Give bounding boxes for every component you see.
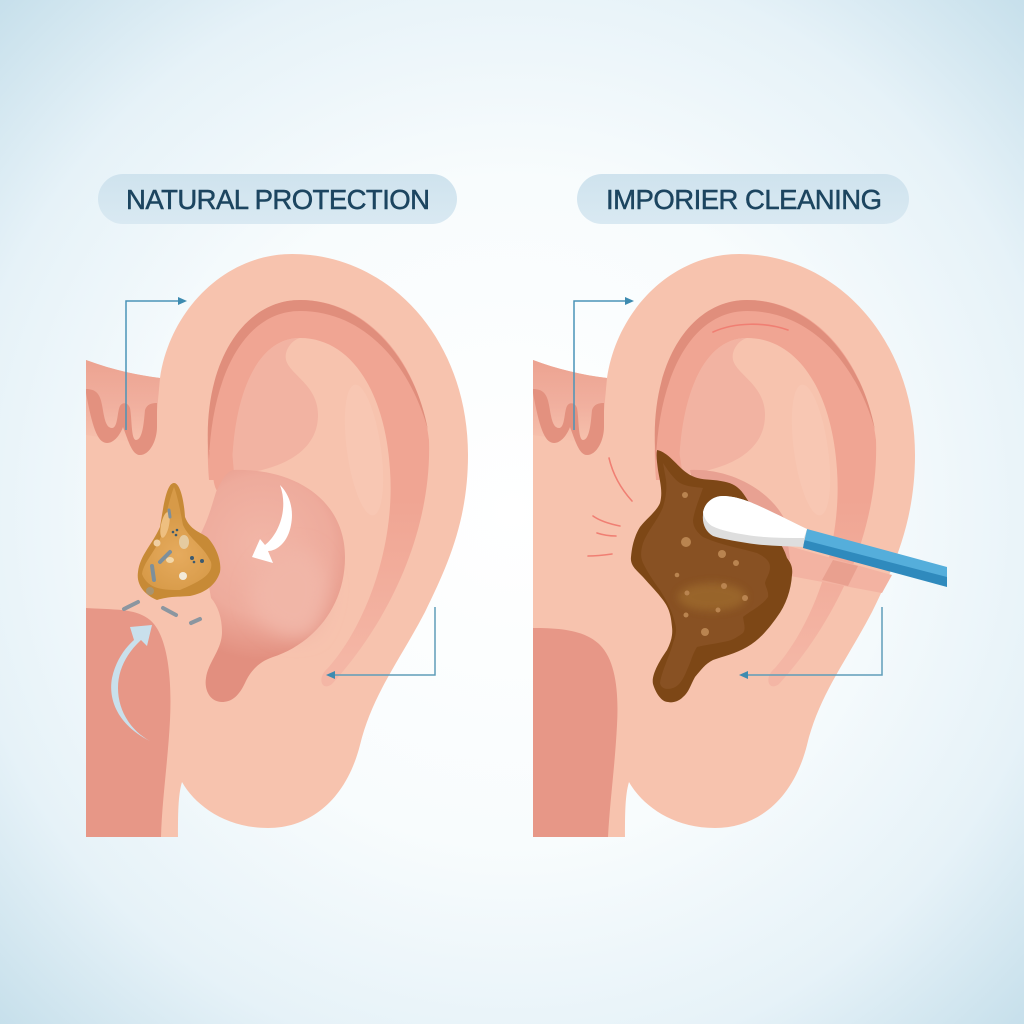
light blue curved arrow — [111, 625, 152, 741]
ear skin: left — [86, 254, 468, 837]
highlight: left — [338, 382, 390, 518]
panel: natural protection — [86, 174, 468, 837]
white curved arrow — [252, 485, 292, 563]
impacted wax: right — [631, 450, 792, 702]
leader arrow: top left — [126, 297, 187, 430]
debris dashes — [124, 602, 200, 623]
skin fold: left — [86, 389, 157, 455]
lower dark block: left — [86, 608, 170, 837]
lower dark block: right — [533, 628, 617, 837]
heading pill: improper cleaning: IMPORIER CLEANING — [606, 184, 882, 215]
bowl highlight: left — [250, 548, 328, 637]
canal band behind swab — [785, 545, 892, 593]
ear skin: right — [533, 254, 915, 837]
panel: improper cleaning — [533, 174, 947, 837]
leader arrow: top right — [574, 297, 634, 430]
ear wax blob: left — [138, 483, 220, 600]
leader arrow: lower right — [739, 607, 882, 679]
heading pill: natural protection: NATURAL PROTECTION — [126, 184, 430, 215]
helix dark edge: left — [208, 300, 428, 460]
neck shading band: right — [533, 360, 607, 445]
helix rim: left — [208, 300, 429, 686]
helix rim: right — [655, 300, 876, 686]
leader arrow: lower right — [326, 607, 435, 679]
ear bowl: left — [200, 470, 345, 702]
neck shading band: left — [86, 360, 160, 445]
heading pill: natural protection — [98, 174, 457, 224]
heading pill: improper cleaning — [577, 174, 909, 224]
highlight: right — [785, 382, 837, 518]
tragus ridge: left — [209, 450, 235, 495]
cotton swab — [703, 496, 947, 587]
irritation marks — [588, 324, 788, 556]
concha visible crescent: right — [690, 470, 790, 560]
skin fold: right — [533, 389, 604, 455]
canal band overlap — [822, 560, 858, 586]
helix dark edge: right — [655, 300, 875, 460]
concha upper: left — [232, 338, 318, 475]
concha upper: right — [679, 338, 765, 475]
tragus ridge: right — [656, 450, 682, 480]
